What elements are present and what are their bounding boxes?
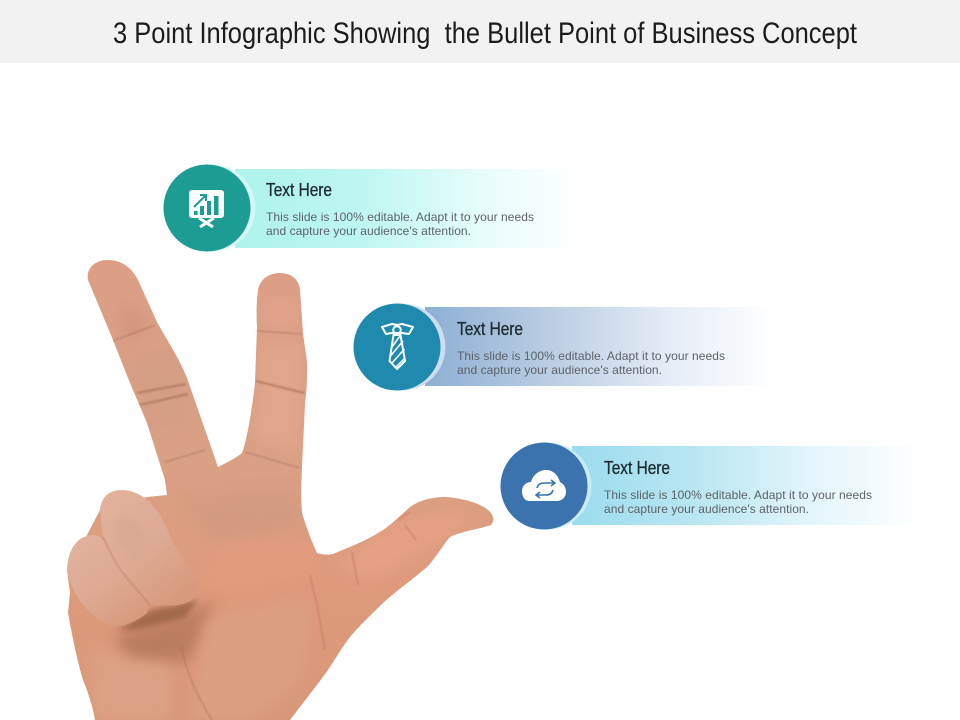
- panel: item 3: [500, 442, 922, 530]
- body 3: and capture your audience's attention.: [604, 502, 809, 516]
- ring 1: [168, 164, 256, 252]
- icon: necktie: [382, 324, 413, 369]
- heading 2: Text Here: [457, 319, 523, 339]
- ring 2: [358, 304, 446, 390]
- heading 3: Text Here: [604, 458, 670, 478]
- body 1: This slide is 100% editable. Adapt it to your needs: [266, 210, 534, 224]
- body 2: and capture your audience's attention.: [457, 363, 662, 377]
- curled upper finger: [100, 490, 197, 606]
- body 1: and capture your audience's attention.: [266, 224, 471, 238]
- heading 1: Text Here: [266, 180, 332, 200]
- panel: item 2: [354, 304, 777, 390]
- icon: cloud sync: [522, 470, 566, 501]
- knuckle creases: [113, 325, 416, 720]
- circle 1: [164, 164, 250, 252]
- body 3: This slide is 100% editable. Adapt it to your needs: [604, 488, 872, 502]
- header band: [0, 0, 960, 63]
- body 2: This slide is 100% editable. Adapt it to your needs: [457, 349, 725, 363]
- curled lower finger: [67, 535, 150, 626]
- band 1: [235, 169, 585, 248]
- ring 3: [504, 442, 592, 530]
- band 3: [572, 446, 922, 525]
- soft finger shading: [115, 514, 148, 560]
- panel: item 1: [164, 164, 585, 252]
- circle 3: [500, 442, 588, 530]
- band 2: [425, 307, 777, 386]
- hand photo illustration: [67, 260, 493, 720]
- icon: presentation chart: [189, 190, 224, 227]
- circle 2: [354, 304, 440, 390]
